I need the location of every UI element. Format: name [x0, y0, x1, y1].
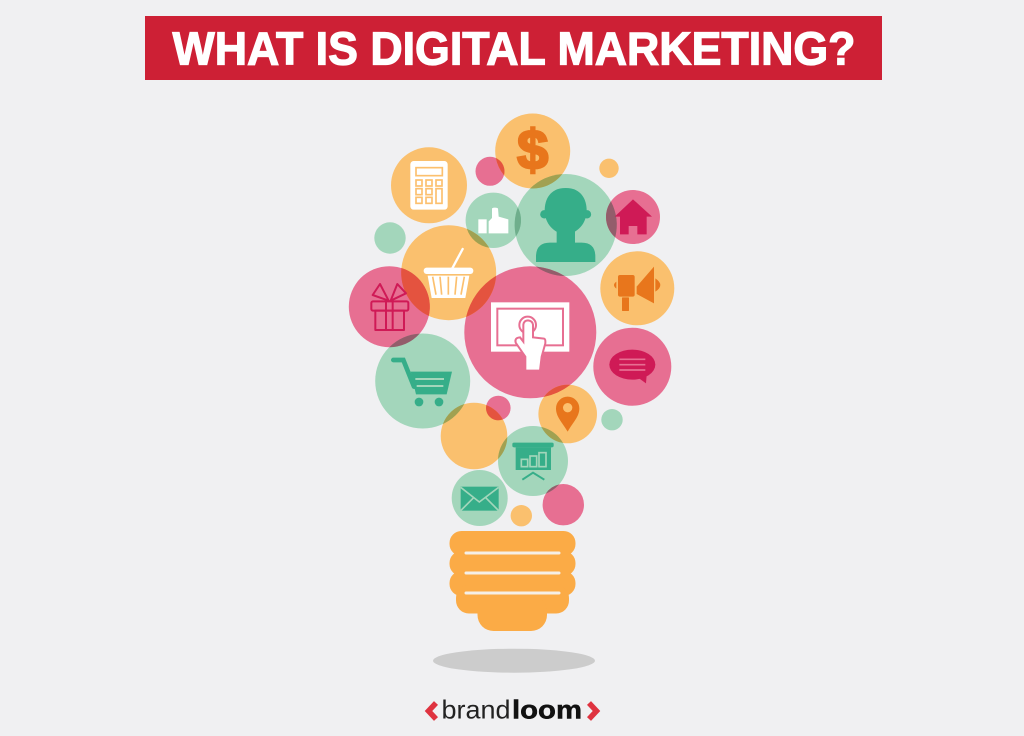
icon: chat — [609, 350, 655, 383]
icon: calculator — [410, 161, 448, 210]
icon: envelope — [461, 487, 499, 511]
bubble: envelope — [452, 470, 508, 526]
icon: touch screen — [491, 302, 569, 371]
bubble overlaps — [389, 158, 617, 494]
bulb shadow — [433, 649, 595, 673]
bubble: basket — [401, 225, 496, 320]
plain orange bubble — [441, 403, 507, 469]
bubble: gift — [349, 266, 430, 347]
icon: presentation chart — [512, 443, 554, 480]
bubble: person — [515, 174, 617, 276]
icon: shopping cart — [393, 360, 452, 406]
icon: person — [536, 188, 595, 262]
bubble: chat — [593, 328, 671, 406]
plain pink bubble — [543, 484, 584, 525]
bubble cluster — [349, 114, 674, 526]
bubble: megaphone — [600, 251, 674, 325]
small bubble: green — [374, 222, 406, 254]
brandloom logo — [428, 694, 596, 724]
icon: basket — [424, 249, 473, 298]
icon: house — [615, 199, 652, 234]
bubble: shopping cart — [375, 334, 470, 428]
small bubble: orange bottom — [511, 505, 532, 526]
title banner: WHAT IS DIGITAL MARKETING? — [172, 22, 856, 74]
icon: megaphone — [614, 267, 660, 311]
small bubble: pink lower — [486, 396, 511, 420]
icon: location pin — [556, 397, 579, 432]
icon: thumbs up — [478, 208, 508, 233]
bubble: house — [606, 190, 660, 244]
brandloom logo: loom — [512, 694, 582, 724]
icon: gift — [371, 284, 408, 330]
small bubble: green lower — [601, 409, 623, 430]
small bubble: pink — [476, 157, 504, 186]
icon: dollar: $ — [517, 118, 548, 181]
bubble: dollar — [495, 114, 570, 188]
bubble: location pin — [538, 385, 597, 443]
bubble: presentation chart — [498, 426, 568, 496]
bubble: calculator — [391, 147, 467, 223]
small bubble: orange — [599, 159, 619, 178]
bubble: touch screen — [464, 266, 596, 398]
bubble: thumbs up — [466, 193, 521, 248]
brandloom logo: brand — [442, 694, 510, 724]
light bulb base — [450, 531, 576, 631]
